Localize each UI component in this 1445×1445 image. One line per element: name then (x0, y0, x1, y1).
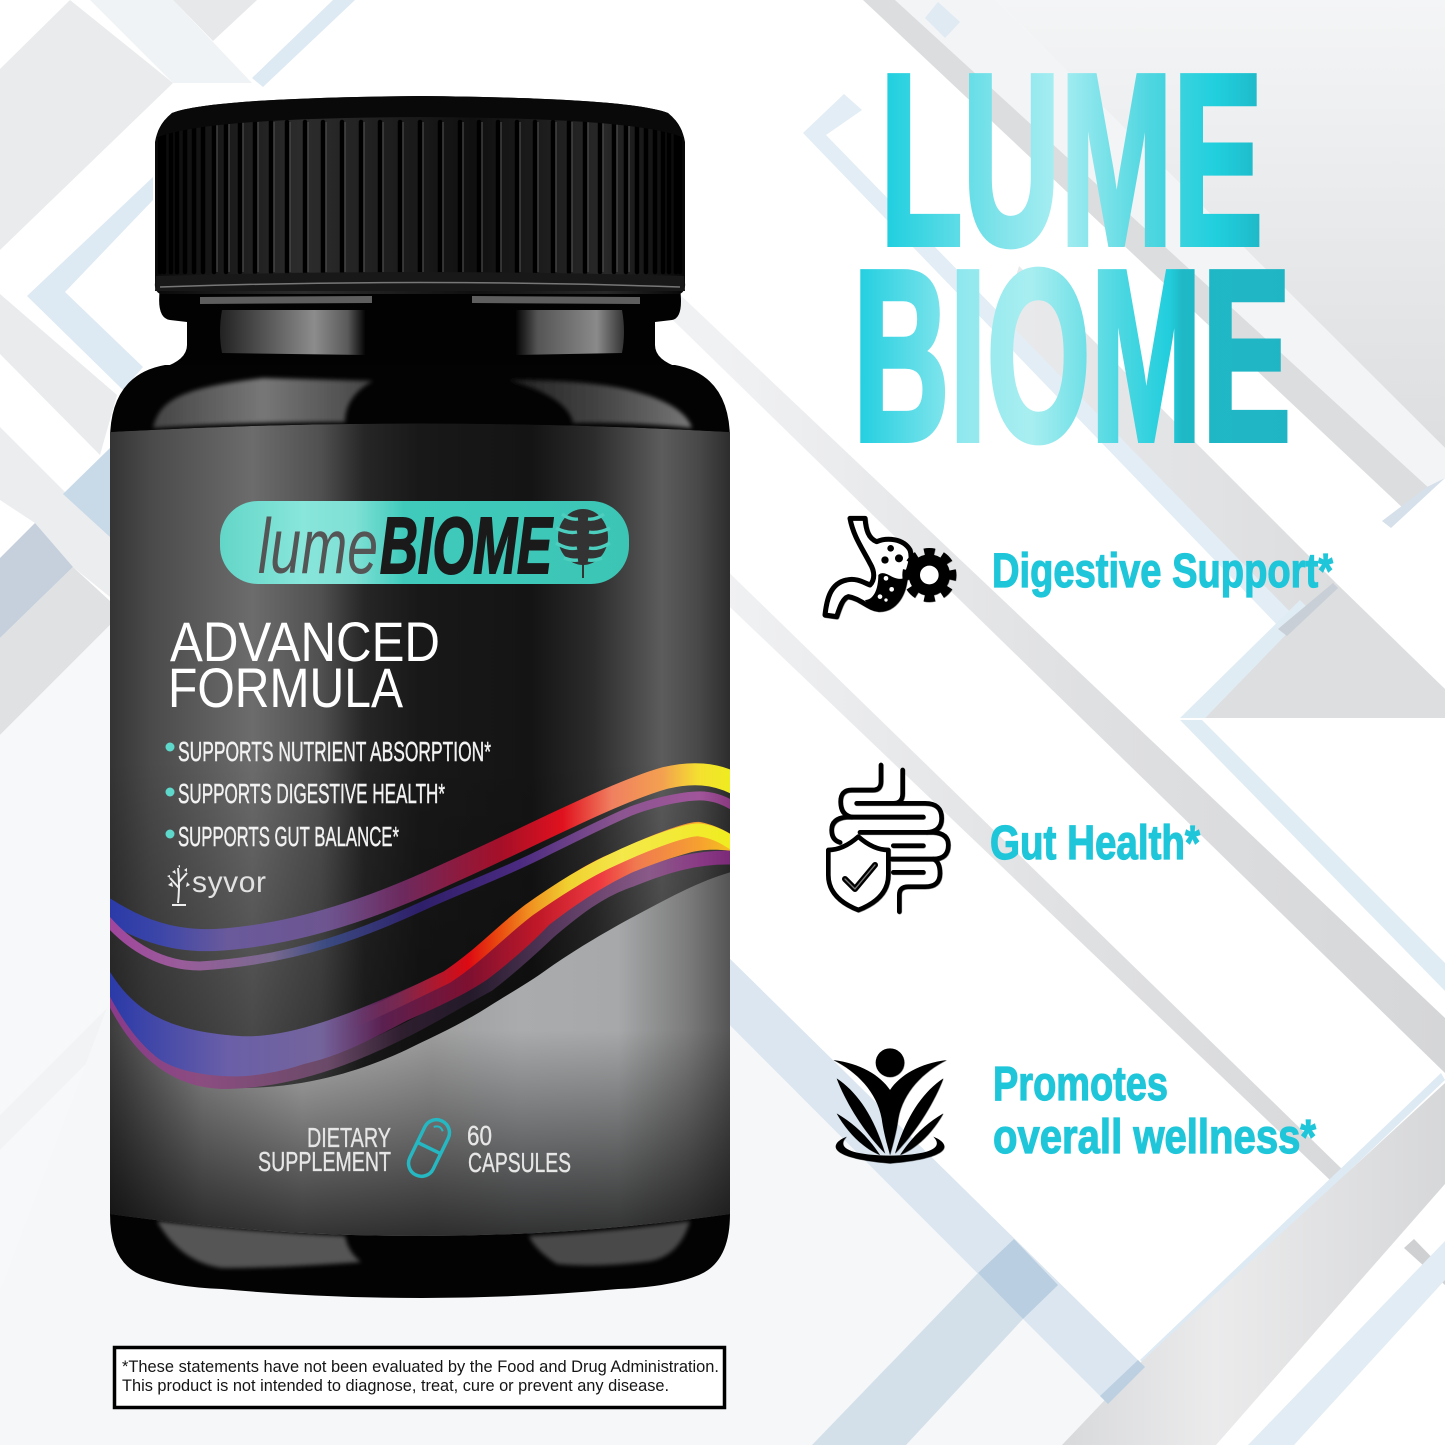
label: promotes overall wellness (993, 1058, 1316, 1164)
disclaimer box (114, 1348, 724, 1408)
benefit bullets on label: SUPPORTS NUTRIENT ABSORPTION* (178, 736, 491, 767)
dietary supplement text (258, 1122, 391, 1177)
dietary supplement text: SUPPLEMENT (258, 1146, 391, 1177)
icon: stomach and gear (825, 518, 953, 617)
icon: intestine and shield (828, 765, 948, 912)
logo wordmark: BIOME (380, 501, 554, 590)
front label (100, 424, 740, 1260)
colour swoosh bands (100, 774, 740, 1082)
benefit bullets on label: SUPPORTS GUT BALANCE* (178, 821, 399, 852)
capsule count: CAPSULES (468, 1147, 571, 1178)
syvor brand mark: syvor (192, 866, 266, 899)
label: promotes overall wellness: Promotes (993, 1058, 1168, 1111)
benefit bullets on label (166, 736, 491, 852)
bottle cap (155, 96, 685, 294)
logo wordmark (258, 501, 554, 590)
grey lower wave (100, 871, 735, 1260)
icon: monstera leaf (556, 509, 610, 578)
base highlights (157, 1221, 690, 1268)
capsule count (467, 1120, 571, 1178)
dietary supplement text: DIETARY (307, 1122, 391, 1153)
logo wordmark: lume (258, 502, 378, 590)
disclaimer box: *These statements have not been evaluated by the Food and Drug Administration. (122, 1358, 719, 1376)
heading: advanced formula (168, 610, 440, 719)
logo pill (220, 501, 629, 590)
heading: advanced formula: FORMULA (168, 656, 404, 719)
disclaimer box: This product is not intended to diagnose, treat, cure or prevent any disease. (122, 1377, 669, 1395)
bottle body (110, 365, 730, 1298)
label: promotes overall wellness: overall wellness* (993, 1111, 1316, 1164)
benefit bullets on label: SUPPORTS DIGESTIVE HEALTH* (178, 778, 445, 809)
title: lume biome (853, 23, 1291, 492)
icon: wellness figure (833, 1048, 947, 1163)
benefit row: overall wellness (833, 1048, 1316, 1164)
syvor brand mark (167, 865, 266, 905)
label: gut health: Gut Health* (990, 817, 1200, 870)
benefit row: gut health (828, 765, 1200, 912)
bottle neck (159, 288, 681, 368)
capsule count: 60 (467, 1120, 492, 1151)
benefit row: digestive support (825, 518, 1333, 617)
shoulder highlights (153, 378, 692, 428)
label: digestive support: Digestive Support* (992, 545, 1333, 598)
icon: capsule (404, 1115, 454, 1181)
product bottle (100, 96, 740, 1298)
heading: advanced formula: ADVANCED (170, 610, 440, 673)
